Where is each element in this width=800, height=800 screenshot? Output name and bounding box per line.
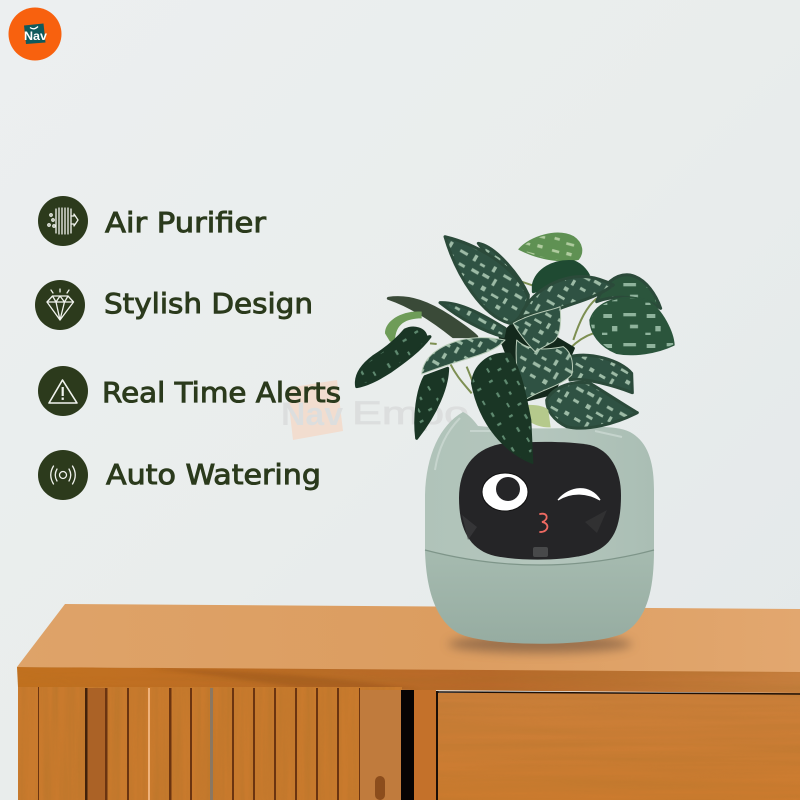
cabinet top surface: [17, 604, 800, 673]
wooden cabinet: [17, 604, 800, 800]
face screen: [459, 442, 621, 560]
leaf: central: [513, 307, 561, 352]
feature: stylish design: Stylish Design: [104, 288, 313, 320]
faint watermark: Nav: [281, 396, 343, 432]
feature: real time alerts: Real Time Alerts: [102, 377, 341, 409]
feature: auto watering: [38, 450, 321, 500]
faint watermark: Empo: [352, 395, 469, 431]
plant foliage: [356, 233, 674, 463]
dark centre mass: [500, 317, 573, 402]
feature: stylish design: [35, 280, 313, 330]
brand logo badge: Nav: [24, 31, 48, 43]
leaf: big top: [445, 237, 528, 323]
feature: auto watering: Auto Watering: [106, 459, 321, 491]
faint watermark: [281, 380, 469, 440]
cabinet front edge: [17, 667, 800, 693]
leaf: dark behind: [533, 261, 588, 292]
sliding slatted door: [18, 687, 402, 800]
leaf: far left: [356, 328, 430, 387]
leaf: back narrow two: [440, 303, 505, 337]
leaf: lower left: [416, 368, 448, 438]
pot upper body: [425, 412, 654, 570]
face: winking eye: [558, 489, 600, 500]
brand logo badge: [8, 8, 62, 60]
leaf: central lower: [516, 340, 572, 400]
stems: [430, 282, 597, 393]
feature list: [35, 196, 341, 500]
dark gap and post: [401, 690, 438, 800]
face: kiss mouth: [540, 514, 547, 532]
pot lower body: [425, 550, 654, 644]
cabinet door right: [438, 692, 800, 800]
leaf: left middle: [422, 338, 505, 374]
leaf: pale small: [515, 405, 551, 427]
feature: real time alerts: [38, 366, 341, 416]
leaf: long diagonal: [520, 277, 613, 317]
leaf: dark centre bottom: [472, 353, 533, 463]
leaf: top behind: [478, 243, 528, 295]
leaf: top light: [519, 233, 582, 261]
leaf: right lower: [570, 355, 632, 393]
plant pot shadow: [448, 635, 632, 653]
pot rim highlights: [435, 418, 622, 470]
leaf: bottom right: [547, 382, 637, 428]
leaf: pale curl: [385, 311, 422, 342]
feature: air purifier: [38, 196, 267, 246]
feature: air purifier: Air Purifier: [105, 207, 267, 239]
leaf: right large: [590, 297, 674, 355]
plant pot: [425, 412, 654, 644]
face: open eye: [482, 473, 528, 511]
leaf: back narrow: [388, 298, 477, 337]
leaf: right upper: [597, 275, 661, 308]
